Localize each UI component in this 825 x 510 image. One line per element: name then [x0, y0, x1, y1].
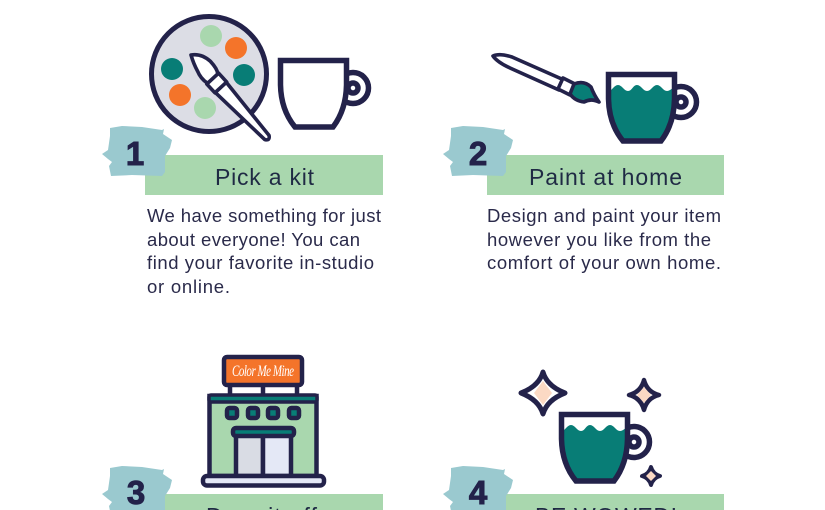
icon: paint brush [185, 48, 276, 145]
heading bar: Pick a kit [145, 155, 383, 195]
number badge 1: 1 [126, 135, 144, 172]
number badge 3: 3 [127, 474, 145, 510]
heading bar: Pick a kit: Pick a kit [215, 164, 315, 190]
heading bar: Paint at home: Paint at home [529, 164, 682, 190]
body text step 2: Design and paint your item [487, 205, 721, 226]
number badge 3 [102, 466, 172, 510]
heading bar: Paint at home [487, 155, 724, 195]
body text step 1: about everyone! You can [147, 229, 360, 250]
body text step 1 [147, 205, 381, 297]
icon: paint palette [152, 16, 266, 132]
number badge 2: 2 [469, 135, 487, 172]
icon: sparkles [521, 372, 660, 485]
number badge 4: 4 [469, 474, 488, 510]
body text step 2: comfort of your own home. [487, 252, 721, 273]
icon: brush with teal paint [493, 55, 599, 102]
panel: step 2 paint at home [443, 55, 724, 273]
icon: finished mug [562, 414, 650, 481]
heading bar: Drop it off [145, 494, 383, 510]
body text step 2: however you like from the [487, 229, 711, 250]
body text step 2 [487, 205, 721, 273]
icon: half painted mug [608, 74, 696, 141]
number badge 4 [443, 466, 513, 510]
icon: Color Me Mine studio storefront: Color Me Mine [232, 362, 294, 379]
icon: blank mug [280, 60, 368, 127]
number badge 2 [443, 126, 513, 176]
body text step 1: or online. [147, 276, 230, 297]
number badge 1 [102, 126, 172, 176]
body text step 1: We have something for just [147, 205, 381, 226]
panel: step 3 drop it off [102, 357, 383, 510]
icon: Color Me Mine studio storefront [203, 357, 324, 486]
body text step 1: find your favorite in-studio [147, 252, 374, 273]
panel: step 4 be wowed [443, 372, 724, 510]
panel: step 1 pick a kit [102, 16, 383, 297]
heading bar: BE WOWED! [487, 494, 724, 510]
